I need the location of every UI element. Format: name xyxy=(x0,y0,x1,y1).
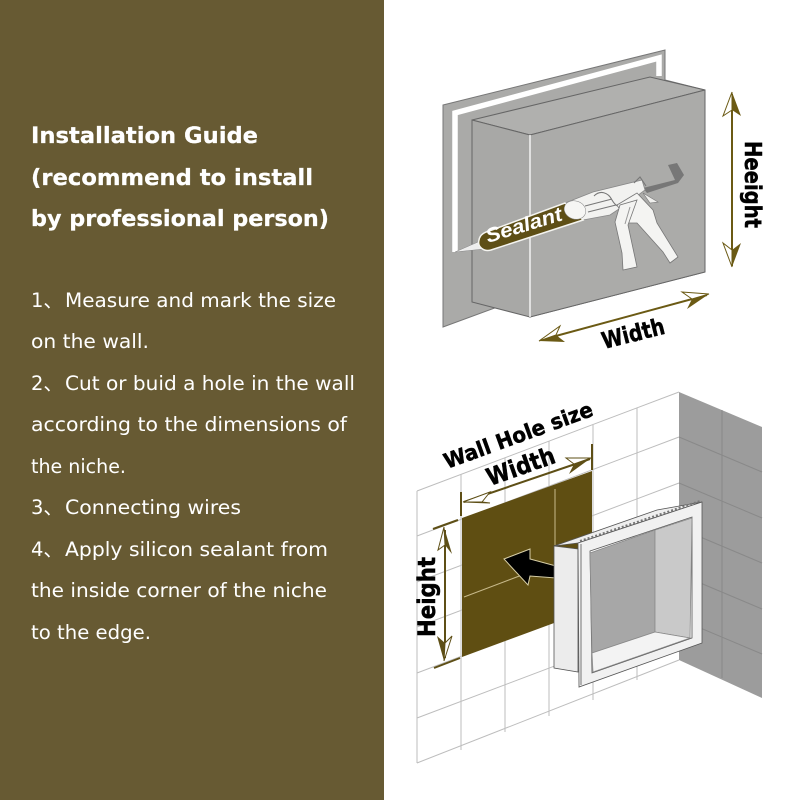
wall hole xyxy=(462,471,592,657)
step 1 text: Measure and mark the size xyxy=(65,289,336,312)
diagram: sealant application on niche xyxy=(443,50,765,355)
side wall xyxy=(679,392,762,698)
label: Width: Width xyxy=(483,442,559,492)
step 2 text: 2、 xyxy=(31,372,63,395)
step 4 text: Apply silicon sealant from xyxy=(65,538,328,561)
step 3 text: 3、 xyxy=(31,496,63,519)
niche box xyxy=(472,77,705,317)
hole height dimension xyxy=(433,520,460,668)
step 2 text xyxy=(31,372,355,478)
sealant tube xyxy=(455,198,588,252)
panel: installation guide xyxy=(0,0,384,800)
hole width dimension xyxy=(461,444,592,516)
sealant bead line xyxy=(455,58,659,252)
heading: Installation Guide xyxy=(31,123,258,149)
step 3 text: Connecting wires xyxy=(65,496,241,519)
step 4 text: to the edge. xyxy=(31,621,151,644)
step 2 text: the niche. xyxy=(31,455,126,478)
step 1 text xyxy=(31,289,336,353)
arrow: height xyxy=(723,92,741,267)
step 4 text xyxy=(31,538,328,644)
tiled wall xyxy=(417,392,679,763)
step 2 text: Cut or buid a hole in the wall xyxy=(65,372,355,395)
diagram: wall hole and niche insertion xyxy=(413,392,762,763)
step 4 text: the inside corner of the niche xyxy=(31,579,327,602)
step 1 text: on the wall. xyxy=(31,330,149,353)
step 2 text: according to the dimensions of xyxy=(31,413,348,436)
arrow: width xyxy=(539,292,709,342)
back flange plate xyxy=(443,50,705,327)
label: Heeight: Heeight xyxy=(739,141,765,228)
label: Width: Width xyxy=(599,314,668,355)
step 4 text: 4、 xyxy=(31,538,63,561)
insertion arrow xyxy=(504,549,556,585)
heading xyxy=(31,123,329,232)
niche unit xyxy=(554,501,702,687)
label: Height: Height xyxy=(413,557,441,637)
label: Sealant: Sealant xyxy=(483,203,566,248)
step 1 text: 1、 xyxy=(31,289,63,312)
heading: by professional person) xyxy=(31,206,329,232)
label: Wall Hole size: Wall Hole size xyxy=(441,397,596,474)
heading: (recommend to install xyxy=(31,165,313,191)
caulking gun xyxy=(565,163,684,270)
